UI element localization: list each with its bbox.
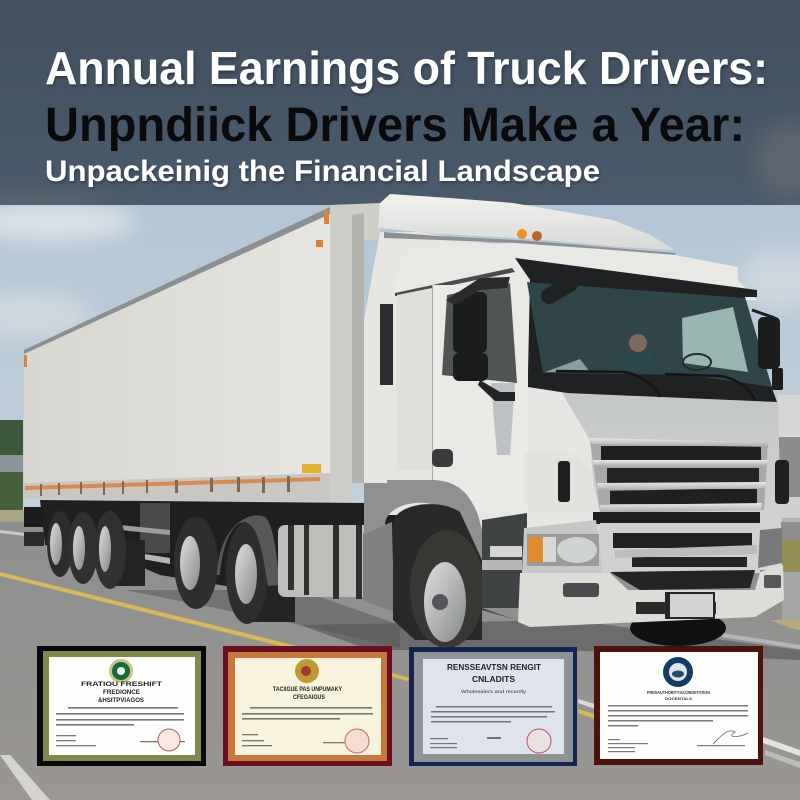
body lines — [430, 706, 555, 748]
certificate 3: Wholesalers and recently — [461, 689, 527, 694]
warning sticker — [302, 464, 321, 473]
lower grille — [600, 523, 760, 573]
upper grille — [590, 438, 768, 513]
header band — [0, 0, 800, 217]
wheel 4 — [174, 517, 218, 609]
fuel tank — [278, 525, 373, 599]
windshield — [515, 258, 777, 402]
truck cab — [364, 194, 789, 648]
certificate 1 — [37, 646, 206, 766]
orange marker lights — [24, 211, 329, 367]
seal — [109, 659, 133, 683]
overhead mirror — [549, 284, 570, 296]
cab upper front — [393, 243, 757, 300]
chassis and rear wheels — [24, 500, 400, 624]
subtitle: Unpackeinig the Financial Landscape — [45, 155, 600, 188]
door window — [442, 283, 517, 383]
black band between grilles — [593, 512, 760, 524]
certificate 2: CFEGAIGUS — [293, 695, 325, 701]
right vent — [775, 460, 789, 504]
signature — [713, 731, 748, 744]
cab side body — [364, 232, 600, 600]
front bumper — [518, 565, 784, 627]
steering wheel — [683, 354, 711, 370]
wheel 2 — [68, 512, 98, 584]
wheel 3 — [94, 511, 145, 589]
seal — [295, 659, 319, 683]
cab door — [387, 283, 528, 513]
driver — [612, 334, 660, 370]
red stamp — [527, 729, 551, 753]
lower cab skirt — [364, 480, 490, 560]
license plate — [665, 592, 715, 619]
cab front panel — [562, 393, 782, 570]
title line 2: Unpndiick Drivers Make a Year: — [45, 99, 745, 152]
rear cab vent — [380, 304, 393, 385]
fog lamp left — [563, 583, 599, 597]
wipers — [556, 371, 755, 400]
wheel 1 — [47, 511, 73, 577]
certificate 2 heading: TACIIGUE PAS UNPUMAKY — [273, 687, 342, 693]
left headlight — [522, 520, 603, 575]
orange reflective stripe — [25, 476, 320, 496]
spoiler shadow line — [384, 232, 675, 255]
title line 1: Annual Earnings of Truck Drivers: — [45, 42, 768, 94]
fog lamp right — [764, 575, 781, 588]
right mirror — [752, 310, 783, 390]
red stamp — [158, 729, 180, 751]
step well — [482, 513, 527, 623]
certificate 1: &HSITPVIAGOS — [98, 698, 144, 704]
front wheel — [393, 504, 484, 648]
trailer box side — [24, 207, 330, 502]
certificate 3 — [409, 647, 577, 766]
certificate 4 heading: FRDSAUTHORITYSACREDITATION — [647, 690, 710, 695]
roof spoiler — [378, 194, 675, 250]
certificate 1: FREDIONCE — [103, 690, 140, 696]
left vent — [558, 461, 570, 502]
certificate 4 — [594, 646, 763, 765]
certificate 2 — [223, 646, 392, 766]
red stamp — [345, 729, 369, 753]
body lines — [56, 707, 185, 746]
trailer — [24, 203, 380, 502]
wheel 5 — [226, 522, 295, 624]
rear mudguard — [217, 515, 280, 586]
body lines — [608, 705, 748, 752]
certificate 1 heading: FRATIOU FRESHIFT — [81, 681, 162, 688]
under-truck shadow — [630, 610, 726, 646]
door mirror — [446, 277, 515, 401]
certificate 3: CNLADITS — [472, 675, 516, 684]
certificate 3 heading: RENSSEAVTSN RENGIT — [447, 663, 541, 672]
trailer rear panel — [330, 203, 380, 502]
corner fairing — [524, 452, 600, 512]
right headlight — [758, 528, 782, 568]
amber roof beacons — [517, 229, 542, 241]
certificate 4: DOCENTALS — [665, 696, 692, 701]
seal — [663, 657, 693, 687]
door handle — [432, 449, 453, 467]
body lines — [242, 707, 373, 746]
